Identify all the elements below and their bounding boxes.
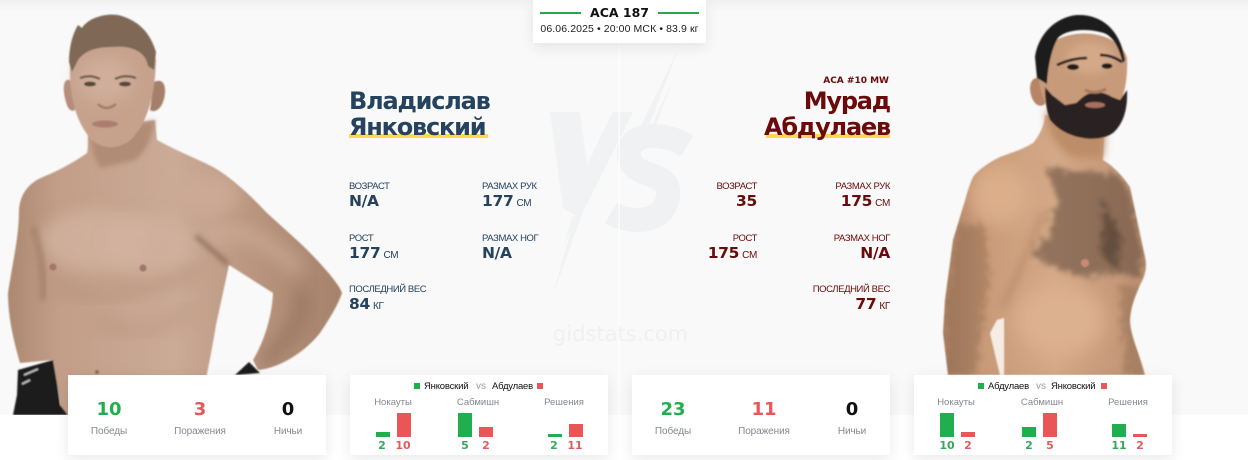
draws: 0 (282, 399, 294, 420)
legend: vs (1036, 381, 1046, 392)
left glove (13, 360, 68, 415)
age: ВОЗРАСТ (716, 181, 757, 192)
leg reach: N/A (860, 244, 890, 262)
nose (98, 104, 116, 108)
knockouts: Нокауты (374, 397, 412, 408)
knockouts (374, 397, 412, 452)
decisions (1108, 397, 1148, 452)
submissions: 2 (1025, 439, 1033, 452)
last weight: 84 КГ (349, 295, 384, 313)
submissions: 5 (1046, 439, 1054, 452)
reach (482, 181, 537, 210)
event details: 06.06.2025 • 20:00 МСК • 83.9 кг (540, 23, 699, 35)
hair (69, 15, 156, 72)
knockouts: 2 (964, 439, 972, 452)
decisions: Решения (544, 397, 584, 408)
draws: Ничьи (838, 426, 866, 437)
name underline (766, 134, 890, 138)
right fighter rank: ACA #10 MW (823, 76, 889, 86)
leg reach: РАЗМАХ НОГ (482, 233, 538, 244)
decisions: 11 (1111, 439, 1127, 452)
event title: ACA 187 (590, 5, 649, 20)
last weight: ПОСЛЕДНИЙ ВЕС (813, 284, 890, 295)
losses: Поражения (738, 426, 790, 437)
left stats (349, 181, 538, 313)
right glove (235, 362, 260, 375)
lips (1085, 102, 1105, 108)
header line left (540, 12, 581, 14)
height: 177 СМ (349, 244, 398, 262)
submissions (457, 397, 499, 452)
legend: Абдулаев (492, 381, 533, 392)
arm hair (945, 225, 990, 375)
age: ВОЗРАСТ (349, 181, 390, 192)
reach: 177 СМ (482, 192, 531, 210)
panel: right record (632, 375, 890, 455)
losses (738, 399, 790, 437)
eyes and brows (1057, 55, 1122, 65)
losses: 3 (194, 399, 206, 420)
event header card (533, 0, 706, 43)
fighter photo: Abdulaev (942, 14, 1147, 375)
decisions: 2 (550, 439, 558, 452)
last weight: 77 КГ (855, 295, 890, 313)
age: 35 (736, 192, 757, 210)
leg reach: N/A (482, 244, 512, 262)
legend (978, 381, 1107, 392)
leg reach (482, 233, 538, 262)
panel: right finish chart (914, 375, 1172, 455)
wins (91, 399, 127, 437)
knockouts: Нокауты (937, 397, 975, 408)
header line right (658, 12, 699, 14)
wins: Победы (91, 426, 127, 437)
losses: 11 (751, 399, 777, 420)
decisions: 11 (567, 439, 583, 452)
neck (1046, 110, 1106, 158)
wins: 10 (96, 399, 122, 420)
submissions (1021, 397, 1063, 452)
right stats (708, 181, 890, 313)
beard (1045, 87, 1127, 139)
nose (1085, 89, 1106, 92)
name underline (349, 134, 488, 138)
last weight (349, 284, 426, 313)
ear (1030, 78, 1045, 106)
watermark: gidstats.com (553, 322, 688, 346)
submissions: Сабмишн (1021, 397, 1063, 408)
name text: Янковский (349, 113, 485, 141)
last weight (813, 284, 890, 313)
body (943, 115, 1146, 375)
reach: РАЗМАХ РУК (835, 181, 890, 192)
submissions: Сабмишн (457, 397, 499, 408)
losses: Поражения (174, 426, 226, 437)
draws (274, 399, 302, 437)
face (1037, 34, 1127, 133)
nipple (1081, 259, 1089, 267)
panel: left finish chart (350, 375, 608, 455)
name text: Мурад (804, 87, 890, 115)
age (349, 181, 390, 210)
wins (655, 399, 691, 437)
draws: 0 (846, 399, 858, 420)
legend: vs (476, 381, 486, 392)
name text (764, 87, 890, 141)
leg reach: РАЗМАХ НОГ (834, 233, 890, 244)
decisions: Решения (1108, 397, 1148, 408)
body (8, 120, 342, 415)
panel: left record (68, 375, 326, 455)
height (349, 233, 398, 262)
hair (1035, 15, 1125, 84)
leg reach (834, 233, 890, 262)
height: РОСТ (733, 233, 757, 244)
name text: Абдулаев (764, 113, 890, 141)
losses (174, 399, 226, 437)
right fighter name (764, 87, 890, 141)
reach: 175 СМ (841, 192, 890, 210)
height: 175 СМ (708, 244, 757, 262)
name text: Владислав (349, 87, 490, 115)
decisions (544, 397, 584, 452)
name text (349, 87, 490, 141)
decisions: 2 (1136, 439, 1144, 452)
legend: Абдулаев (988, 381, 1029, 392)
height (708, 233, 758, 262)
wins: 23 (660, 399, 686, 420)
submissions: 2 (482, 439, 490, 452)
knockouts: 10 (939, 439, 955, 452)
draws (838, 399, 866, 437)
reach (835, 181, 890, 210)
eyes and brows (80, 76, 136, 79)
chest hair (1033, 167, 1143, 277)
face (70, 44, 156, 147)
height: РОСТ (349, 233, 373, 244)
knockouts: 2 (378, 439, 386, 452)
nipples (49, 263, 57, 271)
neck shadow (90, 120, 155, 168)
left fighter name (349, 87, 490, 141)
knockouts (937, 397, 975, 452)
ears (64, 80, 75, 111)
wins: Победы (655, 426, 691, 437)
knockouts: 10 (395, 439, 411, 452)
age: N/A (349, 192, 379, 210)
reach: РАЗМАХ РУК (482, 181, 537, 192)
legend: Янковский (424, 381, 468, 392)
last weight: ПОСЛЕДНИЙ ВЕС (349, 284, 426, 295)
submissions: 5 (461, 439, 469, 452)
age (716, 181, 758, 210)
legend (414, 381, 543, 392)
legend: Янковский (1051, 381, 1095, 392)
lips (92, 120, 118, 128)
fighter photo: Yankovsky (7, 14, 343, 415)
draws: Ничьи (274, 426, 302, 437)
